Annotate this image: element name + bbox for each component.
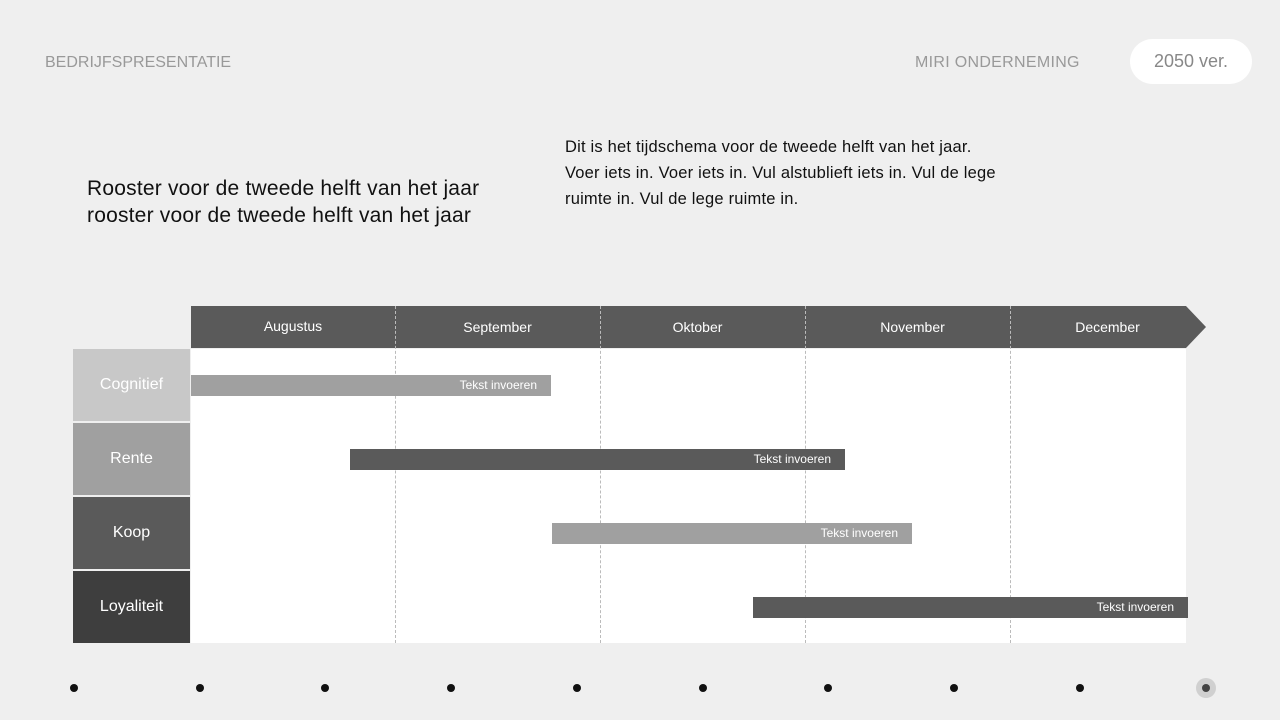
gantt chart: Rente <box>110 450 153 467</box>
title: Rooster voor de tweede helft van het jaar <box>87 177 479 200</box>
row labels: Cognitief <box>100 376 163 393</box>
version pill: 2050 ver. <box>1154 51 1228 71</box>
description: Dit is het tijdschema voor de tweede helft van het jaar. <box>565 138 972 156</box>
description: Voer iets in. Voer iets in. Vul alstublieft iets in. Vul de lege <box>565 164 996 182</box>
bars: Tekst invoeren <box>460 378 537 392</box>
title: rooster voor de tweede helft van het jaar <box>87 204 471 227</box>
gantt chart: Koop <box>113 524 150 541</box>
version pill <box>1130 39 1252 84</box>
title <box>87 177 479 227</box>
gantt chart: December <box>1075 319 1140 335</box>
gantt chart: Oktober <box>673 319 722 335</box>
row labels <box>73 349 190 421</box>
gantt chart: November <box>880 319 945 335</box>
description <box>565 138 996 208</box>
header left: BEDRIJFSPRESENTATIE <box>45 54 231 71</box>
bars <box>191 375 551 396</box>
gantt chart: Augustus <box>264 318 322 334</box>
gantt chart: Tekst invoeren <box>821 526 898 540</box>
month header band <box>191 306 1206 348</box>
header right: MIRI ONDERNEMING <box>915 54 1080 71</box>
gantt chart: September <box>463 319 532 335</box>
gantt chart: Tekst invoeren <box>1097 600 1174 614</box>
gantt chart: Loyaliteit <box>100 598 163 615</box>
gantt chart: Tekst invoeren <box>754 452 831 466</box>
description: ruimte in. Vul de lege ruimte in. <box>565 190 798 208</box>
